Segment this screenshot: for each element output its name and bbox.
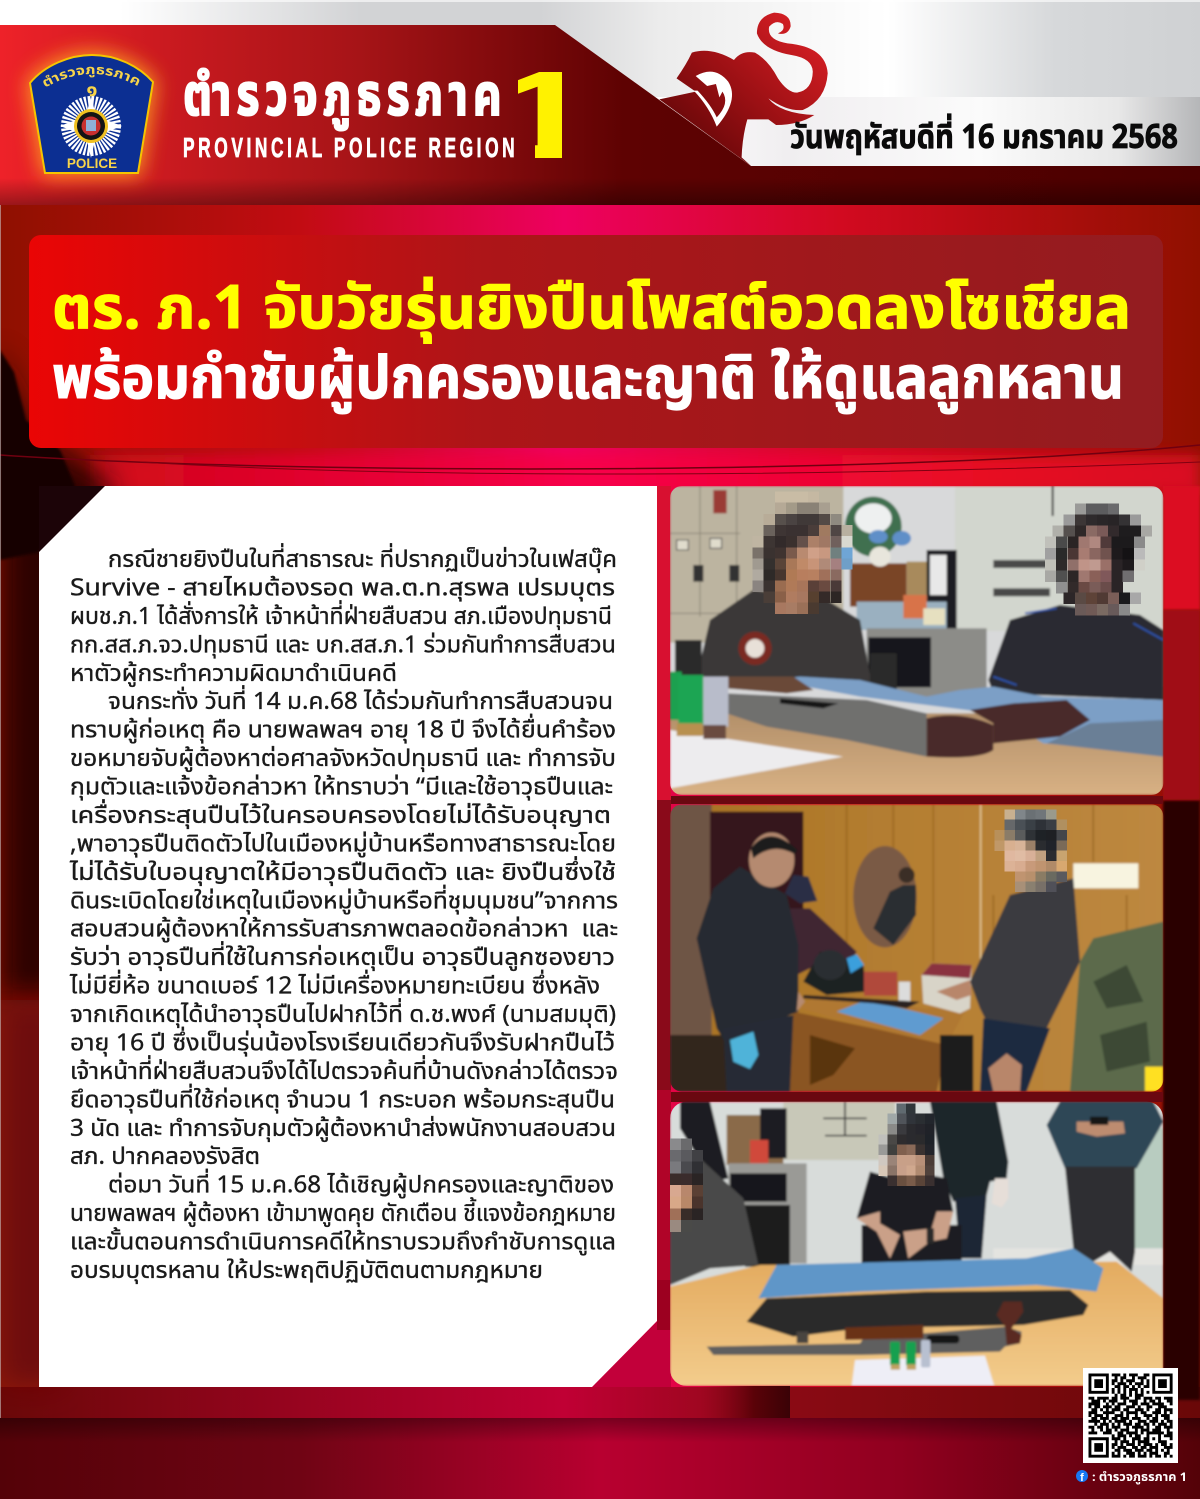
article body: Survive - สายไหมต้องรอด พล.ต.ท.สุรพล เปรมบุตร — [70, 570, 615, 606]
article body: ไม่มียี่ห้อ ขนาดเบอร์ 12 ไม่มีเครื่องหมายทะเบียน ซึ่งหลัง — [69, 969, 600, 1005]
article body: และขั้นตอนการดำเนินการคดีให้ทราบรวมถึงกำชับการดูแล — [70, 1225, 616, 1261]
shotgun — [727, 693, 927, 757]
shotgun — [707, 1327, 1022, 1355]
badge numeral: ๑ — [86, 75, 98, 106]
headline line 2: พร้อมกำชับผู้ปกครองและญาติ ให้ดูแลลูกหลาน — [52, 334, 1124, 425]
article body: ไม่ได้รับใบอนุญาตให้มีอาวุธปืนติดตัว และ ยิงปืนซึ่งใช้ — [69, 855, 616, 891]
article body: เครื่องกระสุนปืนไว้ในครอบครองโดยไม่ได้รับอนุญาต — [70, 798, 611, 834]
header band — [0, 0, 1200, 205]
shells — [670, 672, 682, 720]
article body: ขอหมายจับผู้ต้องหาต่อศาลจังหวัดปทุมธานี และ ทำการจับ — [70, 741, 616, 777]
numeral 1: 1 — [488, 45, 606, 185]
photo 1: suspects with shotgun — [670, 486, 1163, 795]
table — [670, 713, 1163, 795]
article body: ทราบผู้ก่อเหตุ คือ นายพลพลฯ อายุ 18 ปี จึงได้ยื่นคำร้อง — [70, 713, 616, 749]
panel: article text — [39, 486, 657, 1387]
seated man — [862, 1225, 962, 1265]
headline line 1: ตร. ภ.1 จับวัยรุ่นยิงปืนโพสต์อวดลงโซเชียล — [52, 264, 1131, 355]
icon: facebook: f — [1080, 1472, 1084, 1484]
second man — [790, 908, 857, 975]
icon: police badge: POLICE — [67, 156, 117, 171]
date ribbon — [650, 97, 1200, 166]
article body: นายพลพลฯ ผู้ต้องหา เข้ามาพูดคุย ตักเตือน ชี้แจงข้อกฎหมาย — [70, 1196, 616, 1232]
face mosaic — [753, 492, 852, 614]
QR code — [1083, 1368, 1178, 1463]
facebook credit: : ตำรวจภูธรภาค 1 — [1092, 1469, 1187, 1487]
article body: ต่อมา วันที่ 15 ม.ค.68 ได้เชิญผู้ปกครองและญาติของ — [108, 1168, 614, 1204]
badge star — [60, 96, 122, 158]
logo glow — [30, 55, 153, 173]
face mosaics — [878, 1103, 934, 1186]
table — [670, 1262, 1163, 1386]
article body: สอบสวนผู้ต้องหาให้การรับสารภาพตลอดข้อกล่าวหา และ — [70, 912, 618, 948]
article body: สภ. ปากคลองรังสิต — [70, 1139, 260, 1175]
towel — [794, 674, 1164, 745]
article body: ,พาอาวุธปืนติดตัวไปในเมืองหมู่บ้านหรือทางสาธารณะโดย — [70, 826, 616, 862]
article body: อายุ 16 ปี ซึ่งเป็นรุ่นน้องโรงเรียนเดียวกันจึงรับฝากปืนไว้ — [70, 1026, 615, 1062]
mirror — [853, 846, 917, 947]
article body: ยึดอาวุธปืนที่ใช้ก่อเหตุ จำนวน 1 กระบอก พร้อมกระสุนปืน — [70, 1082, 615, 1118]
article body: กรณีชายยิงปืนในที่สาธารณะ ที่ปรากฏเป็นข่าวในเฟสบุ๊ค — [108, 542, 617, 578]
article body: 3 นัด และ ทำการจับกุมตัวผู้ต้องหานำส่งพนักงานสอบสวน — [70, 1111, 616, 1147]
icon: police badge — [29, 54, 154, 174]
article body: อบรมบุตรหลาน ให้ประพฤติปฏิบัติตนตามกฎหมาย — [70, 1253, 543, 1289]
standing man — [930, 1102, 1008, 1202]
brand name — [184, 68, 562, 158]
article body: กุมตัวและแจ้งข้อกล่าวหา ให้ทราบว่า “มีและใช้อาวุธปืนและ — [70, 770, 613, 806]
panel: headline — [29, 235, 1163, 448]
face mosaic — [994, 809, 1067, 892]
photo 3: evidence on table — [670, 1102, 1163, 1386]
header red shape — [0, 25, 1200, 205]
shells — [890, 1342, 900, 1366]
officer — [697, 867, 798, 1045]
article body: หาตัวผู้กระทำความผิดมาดำเนินคดี — [70, 656, 397, 692]
article body: เจ้าหน้าที่ฝ่ายสืบสวนจึงได้ไปตรวจค้นที่บ้านดังกล่าวได้ตรวจ — [70, 1054, 618, 1090]
paper — [852, 1356, 994, 1386]
black shirt — [747, 1290, 1088, 1337]
Thai name: ตำรวจภูธรภาค — [183, 54, 507, 142]
right man — [1047, 1102, 1163, 1168]
photo 2: officer with suspect at desk — [670, 804, 1163, 1092]
article body: กก.สส.ภ.จว.ปทุมธานี และ บก.สส.ภ.1 ร่วมกันทำการสืบสวน — [70, 627, 616, 663]
article body: ดินระเบิดโดยใช่เหตุในเมืองหมู่บ้านหรือที่ชุมนุมชน”จากการ — [70, 883, 618, 919]
article body: ผบช.ภ.1 ได้สั่งการให้ เจ้าหน้าที่ฝ่ายสืบสวน สภ.เมืองปทุมธานี — [70, 599, 612, 635]
suspect — [968, 878, 1082, 1030]
badge arc text: ตำรวจภูธรภาค — [43, 66, 140, 86]
article body: รับว่า อาวุธปืนที่ใช้ในการก่อเหตุเป็น อาวุธปืนลูกซองยาว — [70, 940, 615, 976]
article body: จนกระทั่ง วันที่ 14 ม.ค.68 ได้ร่วมกันทำการสืบสวนจน — [108, 684, 613, 720]
article body — [69, 542, 618, 1289]
left person — [670, 1152, 758, 1285]
article body: จากเกิดเหตุได้นำอาวุธปืนไปฝากไว้ที่ ด.ช.พงศ์ (นามสมมุติ) — [70, 997, 616, 1033]
desk — [938, 1015, 960, 1036]
denim — [758, 1248, 1103, 1298]
footer band — [0, 1418, 1200, 1499]
camo jacket — [1070, 922, 1163, 1092]
English name: PROVINCIAL POLICE REGION — [183, 132, 515, 163]
icon: elephant — [659, 13, 828, 166]
